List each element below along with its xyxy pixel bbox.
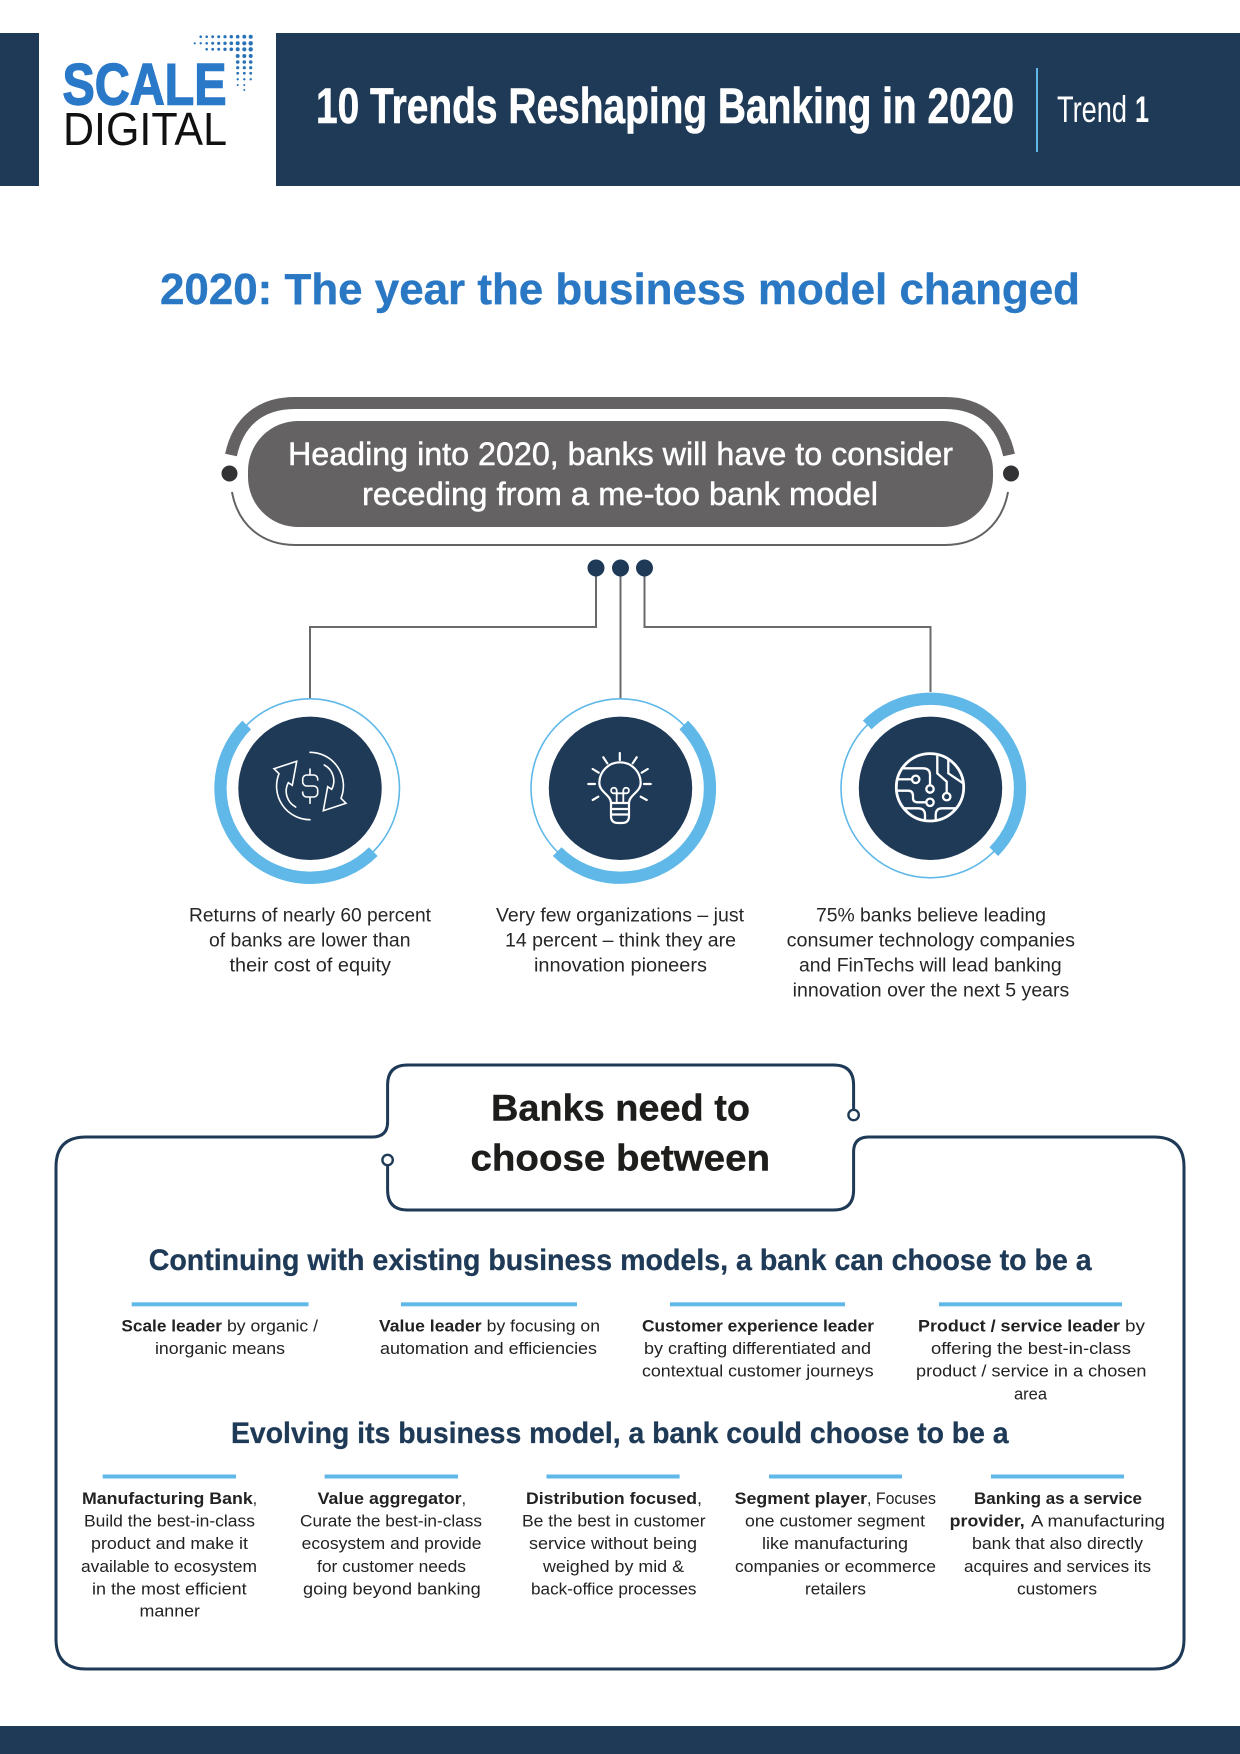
option: segment player: Segment player (735, 1489, 867, 1508)
caption 3: innovation over the next 5 years (793, 981, 1069, 1002)
ring 1 (220, 699, 400, 878)
option: distribution focused: service without being (529, 1534, 697, 1553)
ring 2 (531, 699, 710, 878)
header band (0, 33, 1240, 186)
option: distribution focused: Distribution focused (526, 1489, 697, 1508)
caption 2: Very few organizations – just (496, 906, 745, 927)
option: banking as a service provider (950, 1474, 1165, 1598)
option: manufacturing bank: available to ecosystem (81, 1557, 257, 1576)
icon: light bulb (588, 753, 651, 823)
option: distribution focused: back-office processes (531, 1579, 696, 1598)
caption 2: 14 percent – think they are (505, 931, 736, 952)
caption 1: of banks are lower than (209, 931, 410, 952)
option: value leader: Value leader (379, 1317, 482, 1336)
option: product service leader: Product / service leader (918, 1317, 1120, 1336)
icon: dollar cycle (274, 752, 346, 820)
pill callout (222, 403, 1019, 545)
option: value aggregator: going beyond banking (303, 1579, 481, 1598)
option: value aggregator: ecosystem and provide (302, 1534, 482, 1553)
option: product service leader: offering the best-in-class (931, 1339, 1131, 1358)
option: banking as a service provider: customers (1017, 1579, 1097, 1598)
icon: circuit globe (896, 754, 964, 821)
logo: Scale Digital: DIGITAL (63, 103, 227, 155)
option: product service leader (916, 1302, 1146, 1403)
panel title: choose between (470, 1138, 770, 1179)
option: scale leader: by organic / (227, 1317, 318, 1336)
option: value leader: by focusing on (487, 1317, 600, 1336)
option: value aggregator: Value aggregator (318, 1489, 462, 1508)
panel title: Banks need to (491, 1088, 750, 1129)
option: banking as a service provider: Banking as a service (974, 1489, 1142, 1508)
option: distribution focused: weighed by mid & (542, 1557, 685, 1576)
option: distribution focused: Be the best in customer (522, 1512, 706, 1531)
option: product service leader: by (1125, 1317, 1146, 1336)
footer band (0, 1726, 1240, 1754)
logo: Scale Digital (62, 35, 253, 155)
stat 2 (496, 699, 745, 977)
trend label: 1 (1135, 89, 1149, 130)
option: customer experience leader: by crafting differentiated and (644, 1339, 871, 1358)
subheading: evolving models: Evolving its business model, a bank could choose to be a (231, 1417, 1009, 1450)
option: value aggregator: for customer needs (317, 1557, 466, 1576)
option: manufacturing bank: Manufacturing Bank (82, 1489, 253, 1508)
caption 3: 75% banks believe leading (816, 906, 1046, 927)
option: scale leader: Scale leader (121, 1317, 222, 1336)
option: product service leader: area (1014, 1384, 1048, 1403)
caption 2: innovation pioneers (534, 956, 707, 977)
caption 1 (189, 906, 432, 977)
panel title (470, 1088, 770, 1179)
option: segment player: like manufacturing (762, 1534, 908, 1553)
option: distribution focused (522, 1474, 706, 1598)
option: value aggregator: Curate the best-in-class (300, 1512, 482, 1531)
option: manufacturing bank (81, 1474, 257, 1621)
ring 3 (841, 699, 1020, 878)
option: manufacturing bank: in the most efficient (92, 1579, 247, 1598)
option: distribution focused: , (697, 1489, 702, 1508)
caption 3: consumer technology companies (787, 931, 1075, 952)
logo: Scale Digital: SCALE (62, 52, 226, 118)
option: manufacturing bank: product and make it (91, 1534, 248, 1553)
caption 3: and FinTechs will lead banking (799, 956, 1062, 977)
option: segment player: one customer segment (745, 1512, 925, 1531)
option: segment player (735, 1474, 936, 1598)
caption 3 (787, 906, 1075, 1002)
caption 1: Returns of nearly 60 percent (189, 906, 432, 927)
header title: 10 Trends Reshaping Banking in 2020 (316, 78, 1014, 134)
option: banking as a service provider: A manufacturing (1031, 1512, 1165, 1531)
option: manufacturing bank: Build the best-in-class (84, 1512, 255, 1531)
option: segment player: , Focuses (867, 1489, 936, 1508)
pill text: Heading into 2020, banks will have to consider (288, 436, 953, 472)
caption 2 (496, 906, 745, 977)
option: customer experience leader (642, 1302, 874, 1381)
option: segment player: retailers (805, 1579, 866, 1598)
panel: banks need to choose (56, 1065, 1184, 1669)
option: value aggregator (300, 1474, 482, 1598)
pill text (288, 436, 953, 512)
main heading: 2020: The year the business model changed (160, 265, 1080, 314)
connectors (310, 560, 930, 699)
subheading: existing models: Continuing with existing business models, a bank can choose to be a (149, 1244, 1092, 1277)
option: banking as a service provider: acquires and services its (964, 1557, 1151, 1576)
option: banking as a service provider: provider, (950, 1512, 1025, 1531)
header divider (1036, 68, 1038, 152)
option: value aggregator: , (462, 1489, 466, 1508)
caption 1: their cost of equity (230, 956, 392, 977)
option: product service leader: product / service in a chosen (916, 1362, 1146, 1381)
option: scale leader: inorganic means (155, 1339, 285, 1358)
stat 1 (189, 699, 432, 977)
option: customer experience leader: Customer experience leader (642, 1317, 874, 1336)
option: segment player: companies or ecommerce (735, 1557, 936, 1576)
option: customer experience leader: contextual customer journeys (642, 1362, 874, 1381)
option: manufacturing bank: manner (140, 1602, 200, 1621)
trend label: Trend (1057, 89, 1127, 130)
option: manufacturing bank: , (253, 1489, 257, 1508)
option: scale leader (121, 1302, 318, 1358)
option: value leader: automation and efficiencies (380, 1339, 597, 1358)
stat 3 (787, 699, 1075, 1002)
pill text: receding from a me-too bank model (362, 476, 878, 512)
option: banking as a service provider: bank that also directly (972, 1534, 1144, 1553)
option: value leader (379, 1302, 600, 1358)
